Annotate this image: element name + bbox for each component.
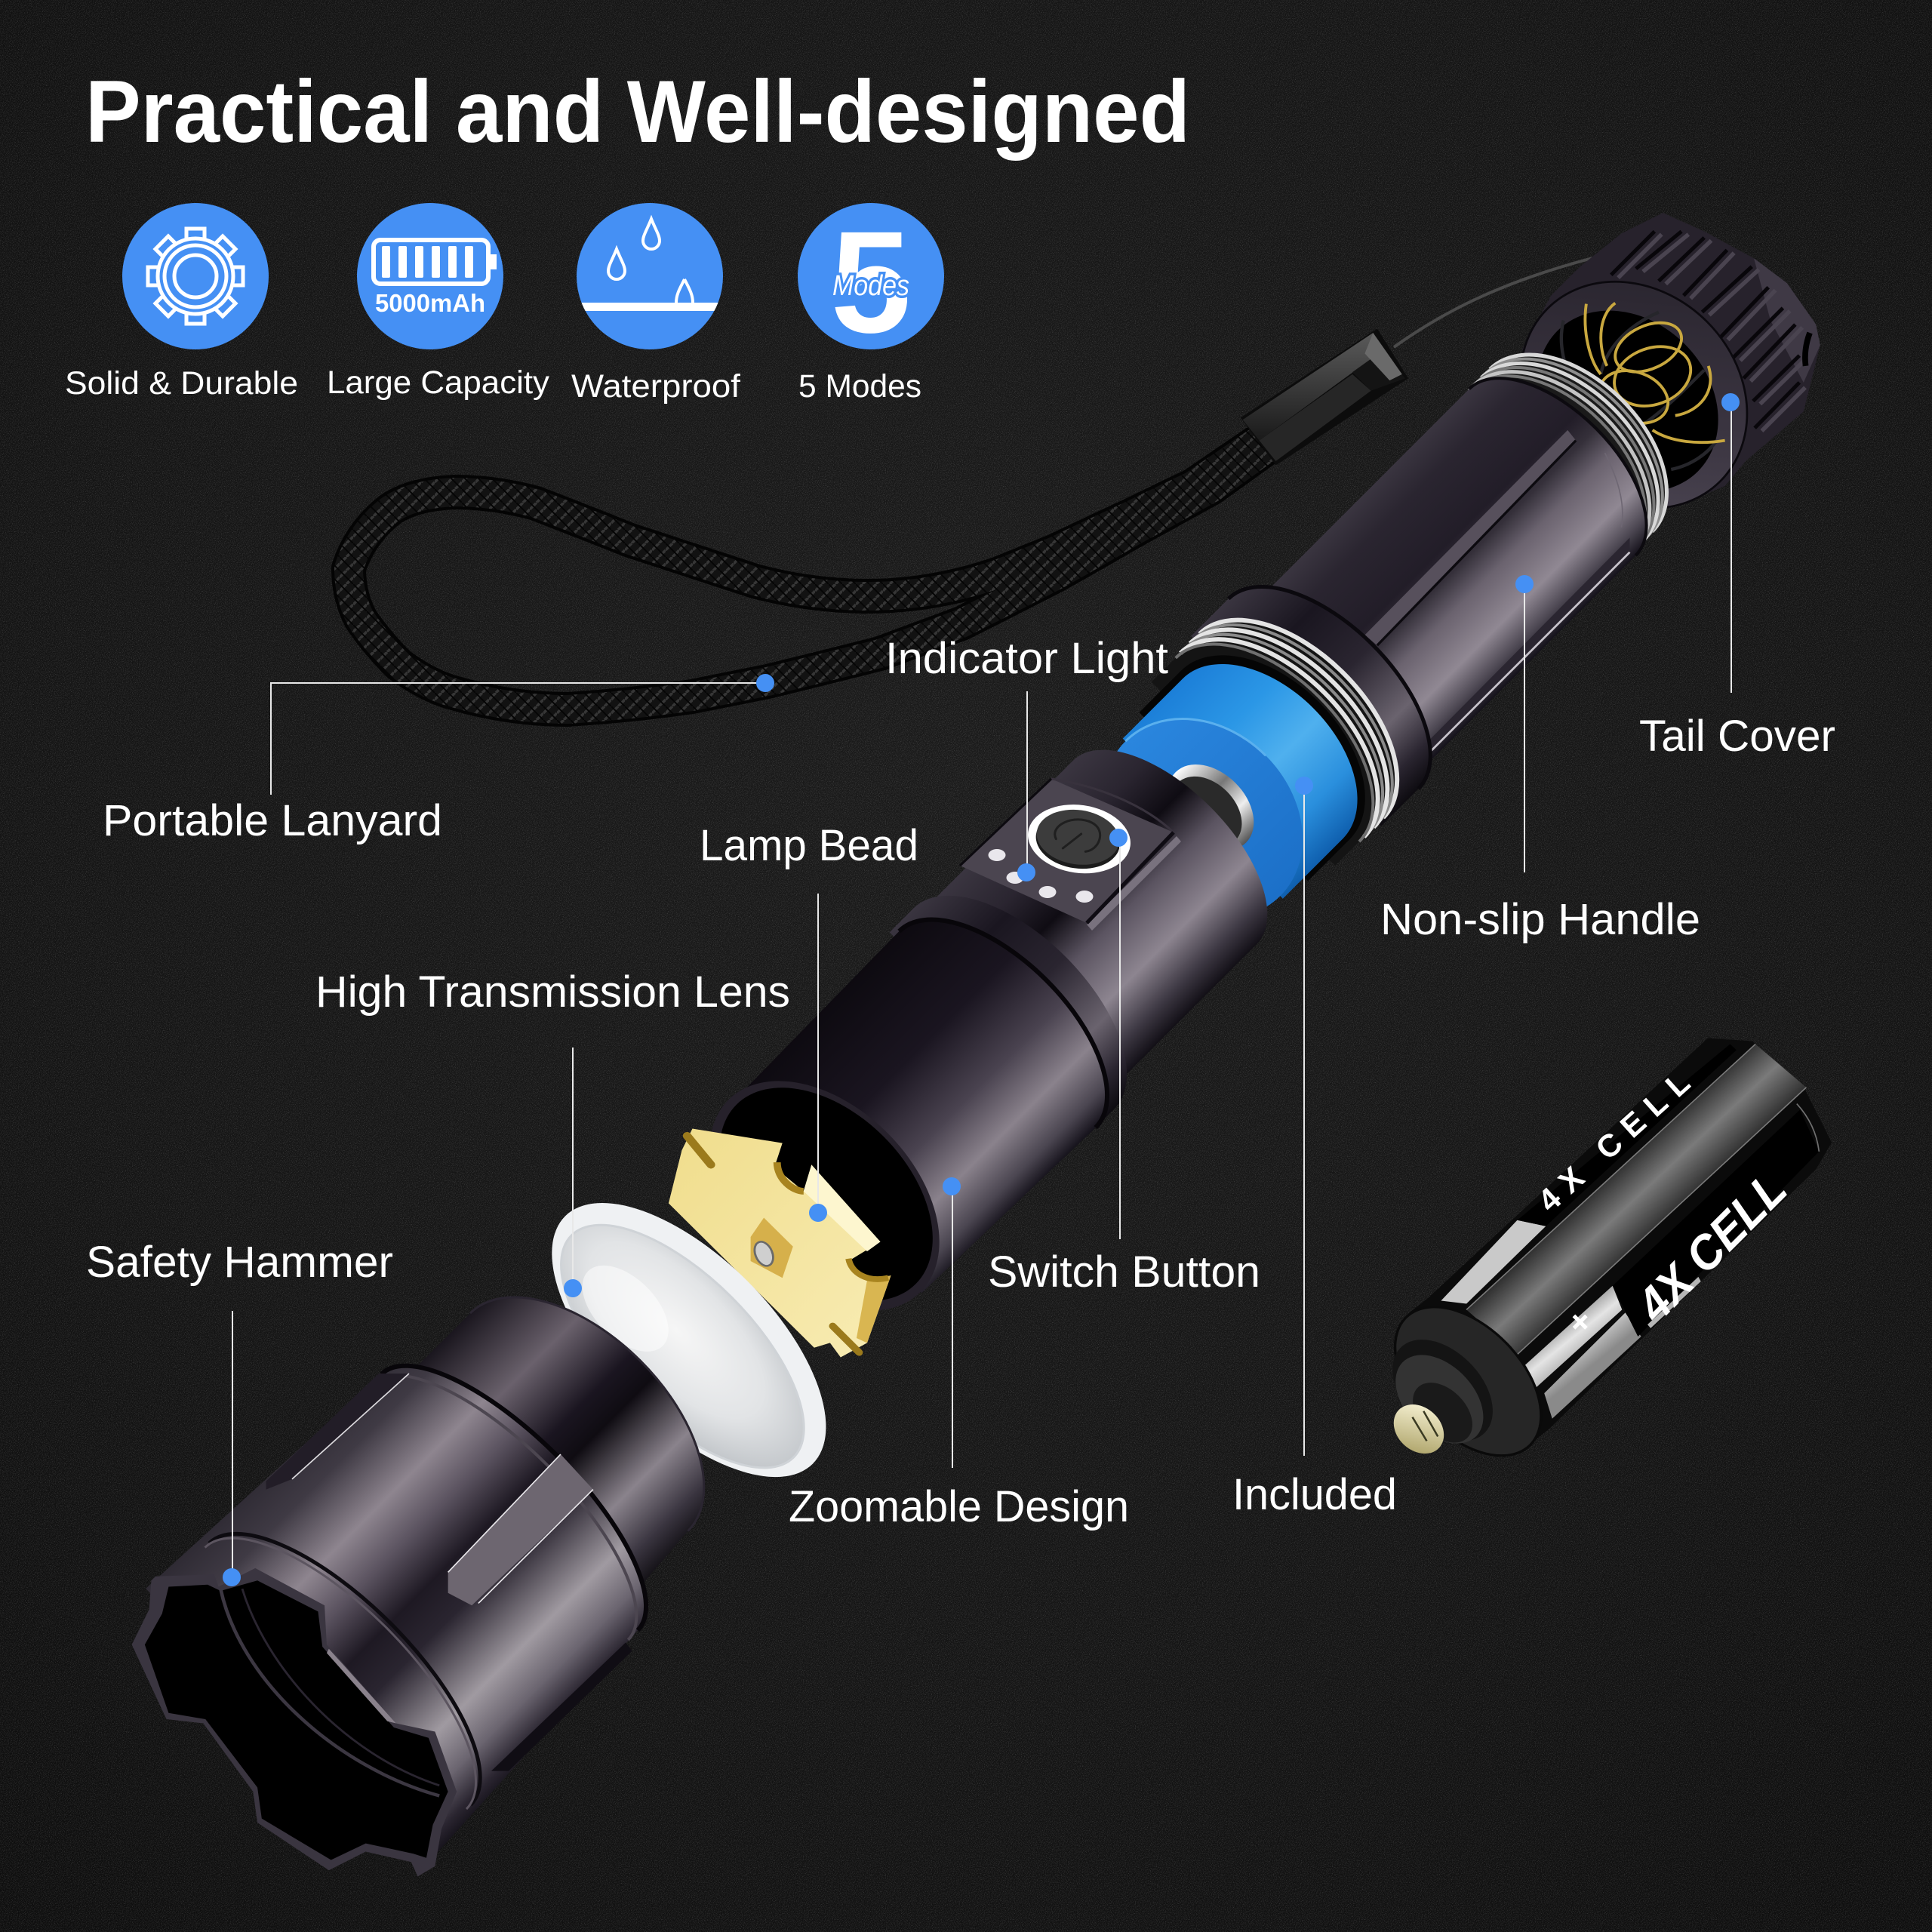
callout: high transmission lens: High Transmission Lens xyxy=(315,968,790,1017)
main flashlight body xyxy=(132,318,1703,1876)
callout: zoomable design: Zoomable Design xyxy=(789,1482,1129,1531)
icon: number five, 5 modes: Modes xyxy=(832,270,909,302)
control panel xyxy=(960,779,1181,931)
high transmission lens xyxy=(506,1158,872,1522)
icon: water drops, waterproof xyxy=(574,203,732,349)
handle grooves xyxy=(1364,430,1629,755)
icon: battery, large capacity: 5000mAh xyxy=(375,289,485,317)
indicator light dots xyxy=(989,849,1093,903)
lanyard cord xyxy=(349,443,1268,709)
callout: safety hammer: Safety Hammer xyxy=(86,1238,393,1287)
callout: lamp bead xyxy=(700,821,918,1222)
callout: switch button: Switch Button xyxy=(988,1247,1260,1297)
icon: battery, large capacity xyxy=(357,203,503,349)
label: large capacity: Large Capacity xyxy=(327,365,549,401)
callout: safety hammer xyxy=(86,1238,393,1586)
callout: non-slip handle xyxy=(1380,575,1700,944)
callout: included xyxy=(1232,777,1397,1519)
label: solid and durable: Solid & Durable xyxy=(65,365,298,401)
feature icons row xyxy=(65,201,944,405)
battery label small: 4X CELL xyxy=(1531,1064,1697,1219)
callout: portable lanyard xyxy=(103,674,774,845)
callout: indicator light: Indicator Light xyxy=(885,634,1168,683)
title: Practical and Well-designed xyxy=(85,62,1190,161)
icon: number five, 5 modes: 5 xyxy=(831,201,911,363)
lamp bead board xyxy=(669,1128,891,1358)
head barrel, safety hammer xyxy=(146,1316,697,1867)
callout: included: Included xyxy=(1232,1470,1397,1519)
callout: high transmission lens xyxy=(315,968,790,1297)
head flats and mouth xyxy=(132,1374,632,1876)
power switch button xyxy=(1023,798,1135,880)
lanyard clip xyxy=(1241,329,1408,466)
head neck xyxy=(380,1252,756,1629)
blue ring xyxy=(1055,617,1403,965)
battery holder shapes xyxy=(1366,1038,1832,1481)
non-slip handle xyxy=(1249,345,1679,775)
callout: indicator light xyxy=(885,634,1168,881)
callout: switch button xyxy=(988,829,1260,1297)
label: 5 modes: 5 Modes xyxy=(798,368,921,405)
callout: tail cover: Tail Cover xyxy=(1639,712,1835,761)
battery label large: 4X CELL xyxy=(1626,1161,1797,1333)
icon: number five, 5 modes xyxy=(798,201,944,363)
upper body section xyxy=(890,709,1313,1133)
callout: lamp bead: Lamp Bead xyxy=(700,821,918,870)
callout: portable lanyard: Portable Lanyard xyxy=(103,796,442,845)
handle threads at tail xyxy=(1463,318,1703,558)
battery plus sign: + xyxy=(1558,1300,1601,1343)
lanyard wire xyxy=(1394,258,1592,347)
tail cover xyxy=(1475,213,1820,555)
collar and threads near blue ring xyxy=(1149,549,1468,869)
lower body section, zoomable xyxy=(666,881,1145,1360)
callout: zoomable design xyxy=(789,1177,1129,1531)
icon: gear, solid and durable xyxy=(122,203,269,349)
label: waterproof: Waterproof xyxy=(571,368,741,405)
included battery xyxy=(1366,1038,1832,1481)
callout: non-slip handle: Non-slip Handle xyxy=(1380,895,1700,944)
callout: tail cover xyxy=(1639,393,1835,761)
